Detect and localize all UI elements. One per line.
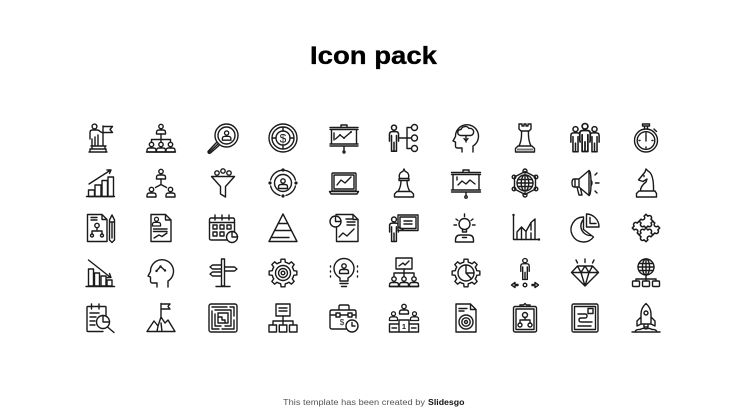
footer credit bbox=[283, 398, 465, 407]
icon: magnifier on person bbox=[208, 124, 238, 153]
icon: team around chart board bbox=[390, 258, 418, 286]
icon: people network bbox=[147, 169, 175, 197]
icon: chess knight bbox=[636, 169, 656, 197]
icon: framed plan bbox=[572, 304, 598, 332]
icon: light bulb with person bbox=[330, 258, 358, 286]
icon: laptop with chart bbox=[330, 173, 358, 194]
icon: dollar target coin: $ bbox=[280, 131, 287, 145]
icon: rocket launch bbox=[632, 304, 660, 332]
icon: pie chart bbox=[571, 214, 599, 242]
icon: board with line chart bbox=[452, 170, 480, 198]
icon: presenter with board bbox=[390, 215, 418, 242]
icon: stopwatch bbox=[634, 124, 658, 152]
icon: hierarchy of people bbox=[146, 124, 176, 152]
icon: report with pie and chart bbox=[330, 214, 358, 242]
icon: head with graph bbox=[148, 260, 173, 287]
icon: growth bar chart with arrow bbox=[86, 170, 114, 196]
icon: organisation chart bbox=[269, 304, 297, 332]
icon: diamond bbox=[572, 259, 598, 286]
icon: gear target bbox=[269, 259, 297, 287]
icon: chess rook bbox=[516, 124, 534, 152]
footer credit: Slidesgo bbox=[428, 398, 465, 407]
icon: document with flow and pencil bbox=[88, 214, 114, 242]
icon: briefcase with clock bbox=[330, 305, 358, 332]
icon: calendar with pie bbox=[210, 215, 238, 242]
icon: document with target bbox=[456, 304, 476, 332]
icon: globe network bbox=[512, 169, 538, 197]
icon: mountain with flag bbox=[147, 304, 175, 332]
icon: puzzle pieces bbox=[629, 211, 663, 245]
icon: head with cloud bbox=[453, 125, 478, 152]
title: Icon pack bbox=[310, 42, 437, 70]
icon: clipboard with magnifier bbox=[87, 304, 114, 332]
icon: person with three options bbox=[389, 124, 418, 152]
icon: dollar target coin bbox=[269, 124, 297, 152]
icon: idea bulb person bbox=[454, 214, 475, 242]
icon: person choosing direction bbox=[512, 259, 538, 288]
icon: leader with flag on podium bbox=[89, 124, 112, 152]
icon: line chart with bars bbox=[512, 214, 540, 241]
icon: clipboard with org diagram bbox=[514, 304, 536, 332]
footer credit: This template has been created by bbox=[283, 398, 425, 407]
icon: presentation board bbox=[330, 125, 358, 153]
icon: gear with pie bbox=[452, 259, 480, 287]
icon: chess pawn bbox=[394, 169, 414, 197]
icon: resume document bbox=[151, 214, 171, 242]
icon: podium with winners: 1 bbox=[402, 322, 406, 331]
icon: podium with winners bbox=[389, 304, 419, 332]
icon: briefcase with clock: $ bbox=[340, 318, 345, 327]
icon: funnel bbox=[212, 169, 234, 197]
icon: signpost bbox=[210, 259, 237, 286]
icon: maze bbox=[209, 304, 237, 332]
icon: pyramid chart bbox=[269, 214, 297, 242]
icon grid bbox=[86, 124, 663, 332]
icon: megaphone bbox=[572, 170, 599, 196]
icon: declining bar chart bbox=[86, 260, 114, 286]
icon: team of three bbox=[571, 124, 599, 152]
icon: person target bbox=[268, 168, 298, 198]
icon: globe with network boxes bbox=[632, 259, 660, 286]
